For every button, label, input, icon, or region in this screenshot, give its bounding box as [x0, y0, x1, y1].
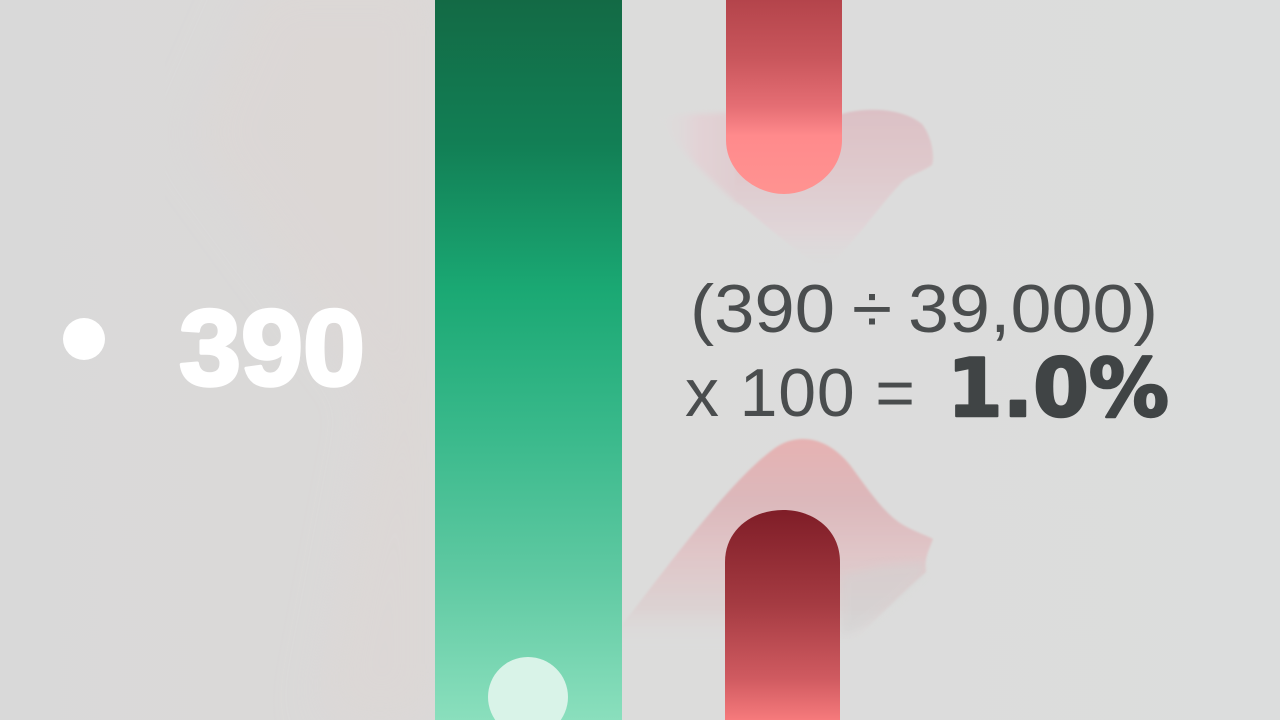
- green central bar: [435, 0, 622, 720]
- result 1.0%: 1.0%: [947, 342, 1169, 435]
- shadow: top red bar, right side: [735, 110, 933, 272]
- formula line 2: x 100 =: [685, 355, 915, 431]
- formula line 1: (390: [690, 271, 835, 347]
- shadow: top red bar, left side: [655, 112, 740, 205]
- faint pink shadow, left panel: [190, 0, 435, 720]
- formula line 1: 39,000): [908, 271, 1158, 347]
- bottom red bar: [725, 510, 840, 720]
- formula line 1: [690, 271, 1158, 347]
- top red bar: [726, 0, 842, 194]
- number 390: 390: [179, 287, 365, 408]
- formula line 1: ÷: [852, 271, 892, 347]
- shadow: grey fold, bottom right: [842, 562, 924, 636]
- shadow: bottom red bar: [622, 439, 933, 720]
- white dot on green bar: [488, 657, 568, 720]
- bullet dot: [63, 318, 105, 360]
